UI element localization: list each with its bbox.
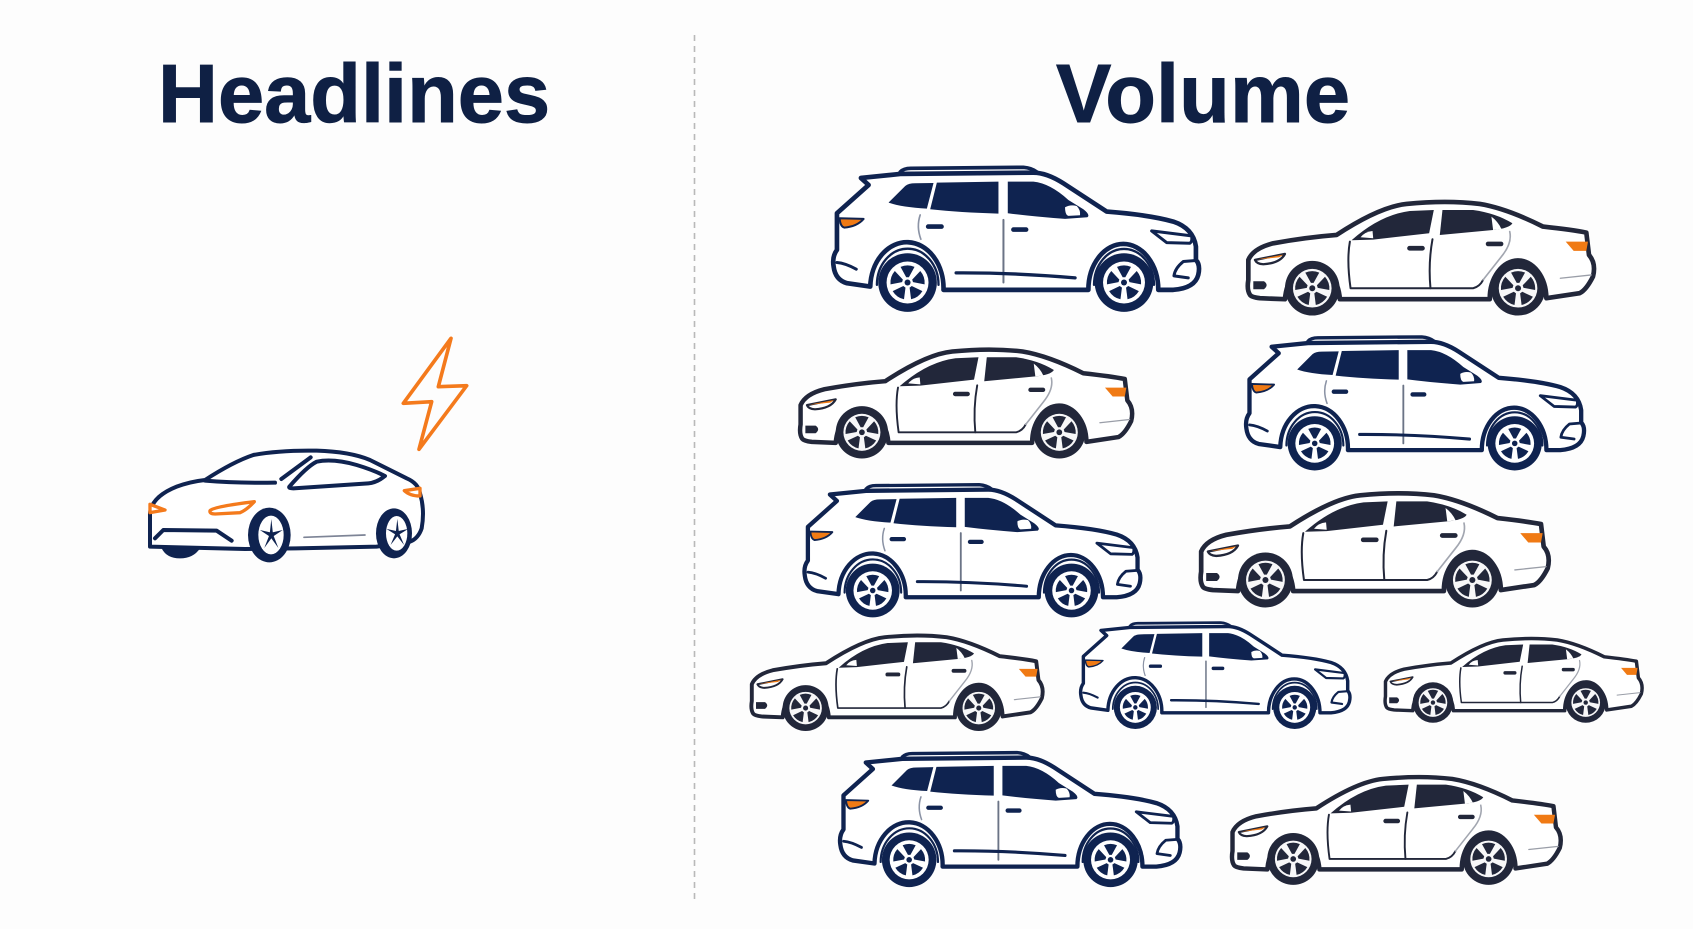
car lights: [150, 488, 420, 514]
heading: Volume: Volume: [1056, 47, 1350, 140]
car: SUV row 5: [840, 753, 1180, 887]
rear wheel: [376, 508, 412, 558]
heading: Headlines: Headlines: [158, 47, 550, 140]
car: SUV row 2: [1246, 337, 1584, 470]
icon: lightning bolt: [403, 338, 467, 449]
car: sedan row 1: [1248, 202, 1594, 316]
car: sedan row 4 left: [751, 635, 1043, 731]
car: SUV row 1: [833, 167, 1199, 312]
car: SUV row 4 middle: [1081, 623, 1350, 729]
car: sedan row 5: [1232, 777, 1561, 885]
car: sedan row 3: [1201, 493, 1549, 607]
icon: electric car with lightning bolt: [150, 338, 467, 562]
panel: headlines: [150, 47, 550, 562]
car: sedan row 2: [800, 350, 1132, 458]
car windows: [155, 457, 385, 541]
car: SUV row 3: [804, 485, 1140, 617]
car underbody: [162, 548, 200, 558]
car side trim: [304, 535, 365, 537]
car: sedan row 4 right: [1385, 639, 1642, 723]
car body: [150, 451, 423, 549]
front wheel: [248, 508, 291, 562]
panel: volume: [751, 47, 1642, 887]
